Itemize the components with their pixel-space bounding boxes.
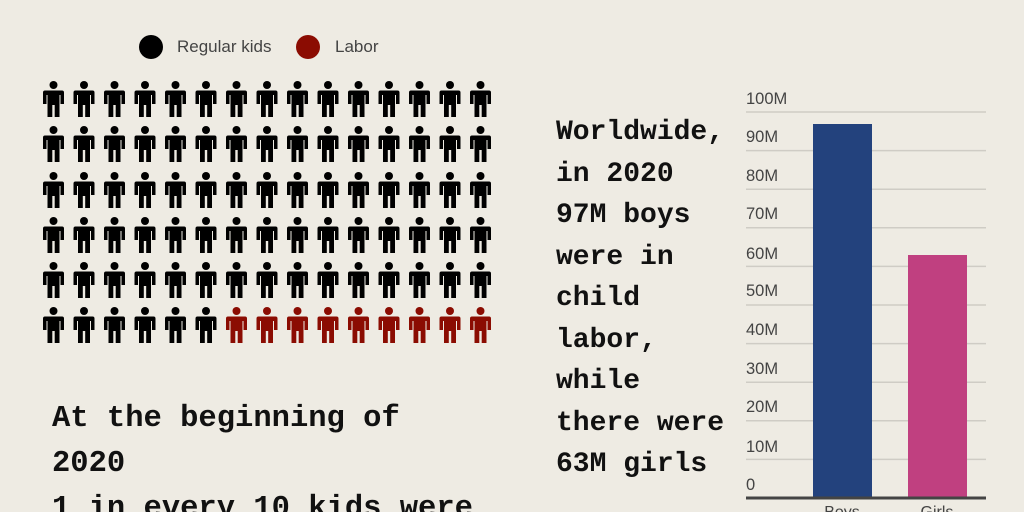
legend: Labor [335, 37, 378, 56]
y-axis labels: 90M [746, 128, 778, 146]
bar chart [746, 90, 986, 512]
legend: regular kids [139, 35, 163, 59]
icon grid: 90 kids, 9 in labor [43, 81, 491, 343]
y-axis labels: 50M [746, 282, 778, 300]
y-axis labels [746, 90, 787, 494]
y-axis labels: 60M [746, 245, 778, 263]
text block: right statement: there were [556, 408, 724, 438]
text block: right statement: labor, [556, 324, 657, 356]
text block: left statement: At the beginning of [52, 402, 400, 436]
text block: right statement: while [556, 366, 640, 397]
text block: right statement: 97M boys [556, 200, 690, 231]
text block: right statement: 63M girls [556, 449, 707, 480]
y-axis labels: 30M [746, 360, 778, 378]
text block: right statement: in 2020 [556, 158, 674, 190]
text block: left statement: 2020 [52, 447, 125, 481]
bar: girls 63M [908, 255, 967, 498]
y-axis labels: 0 [746, 476, 755, 494]
y-axis labels: 70M [746, 205, 778, 223]
text block: left statement [52, 402, 473, 512]
y-axis labels: 100M [746, 90, 787, 108]
legend [139, 35, 378, 59]
text block: right statement: were in [556, 242, 674, 272]
text block: right statement: child [556, 283, 640, 314]
y-axis labels: 10M [746, 438, 778, 456]
y-axis labels: 20M [746, 398, 778, 416]
y-axis labels: 80M [746, 167, 778, 185]
text block: right statement [556, 117, 724, 480]
bar: boys 97M [813, 124, 872, 498]
y-axis labels: 40M [746, 321, 778, 339]
text block: right statement: Worldwide, [556, 117, 724, 148]
legend: Regular kids [177, 37, 272, 56]
